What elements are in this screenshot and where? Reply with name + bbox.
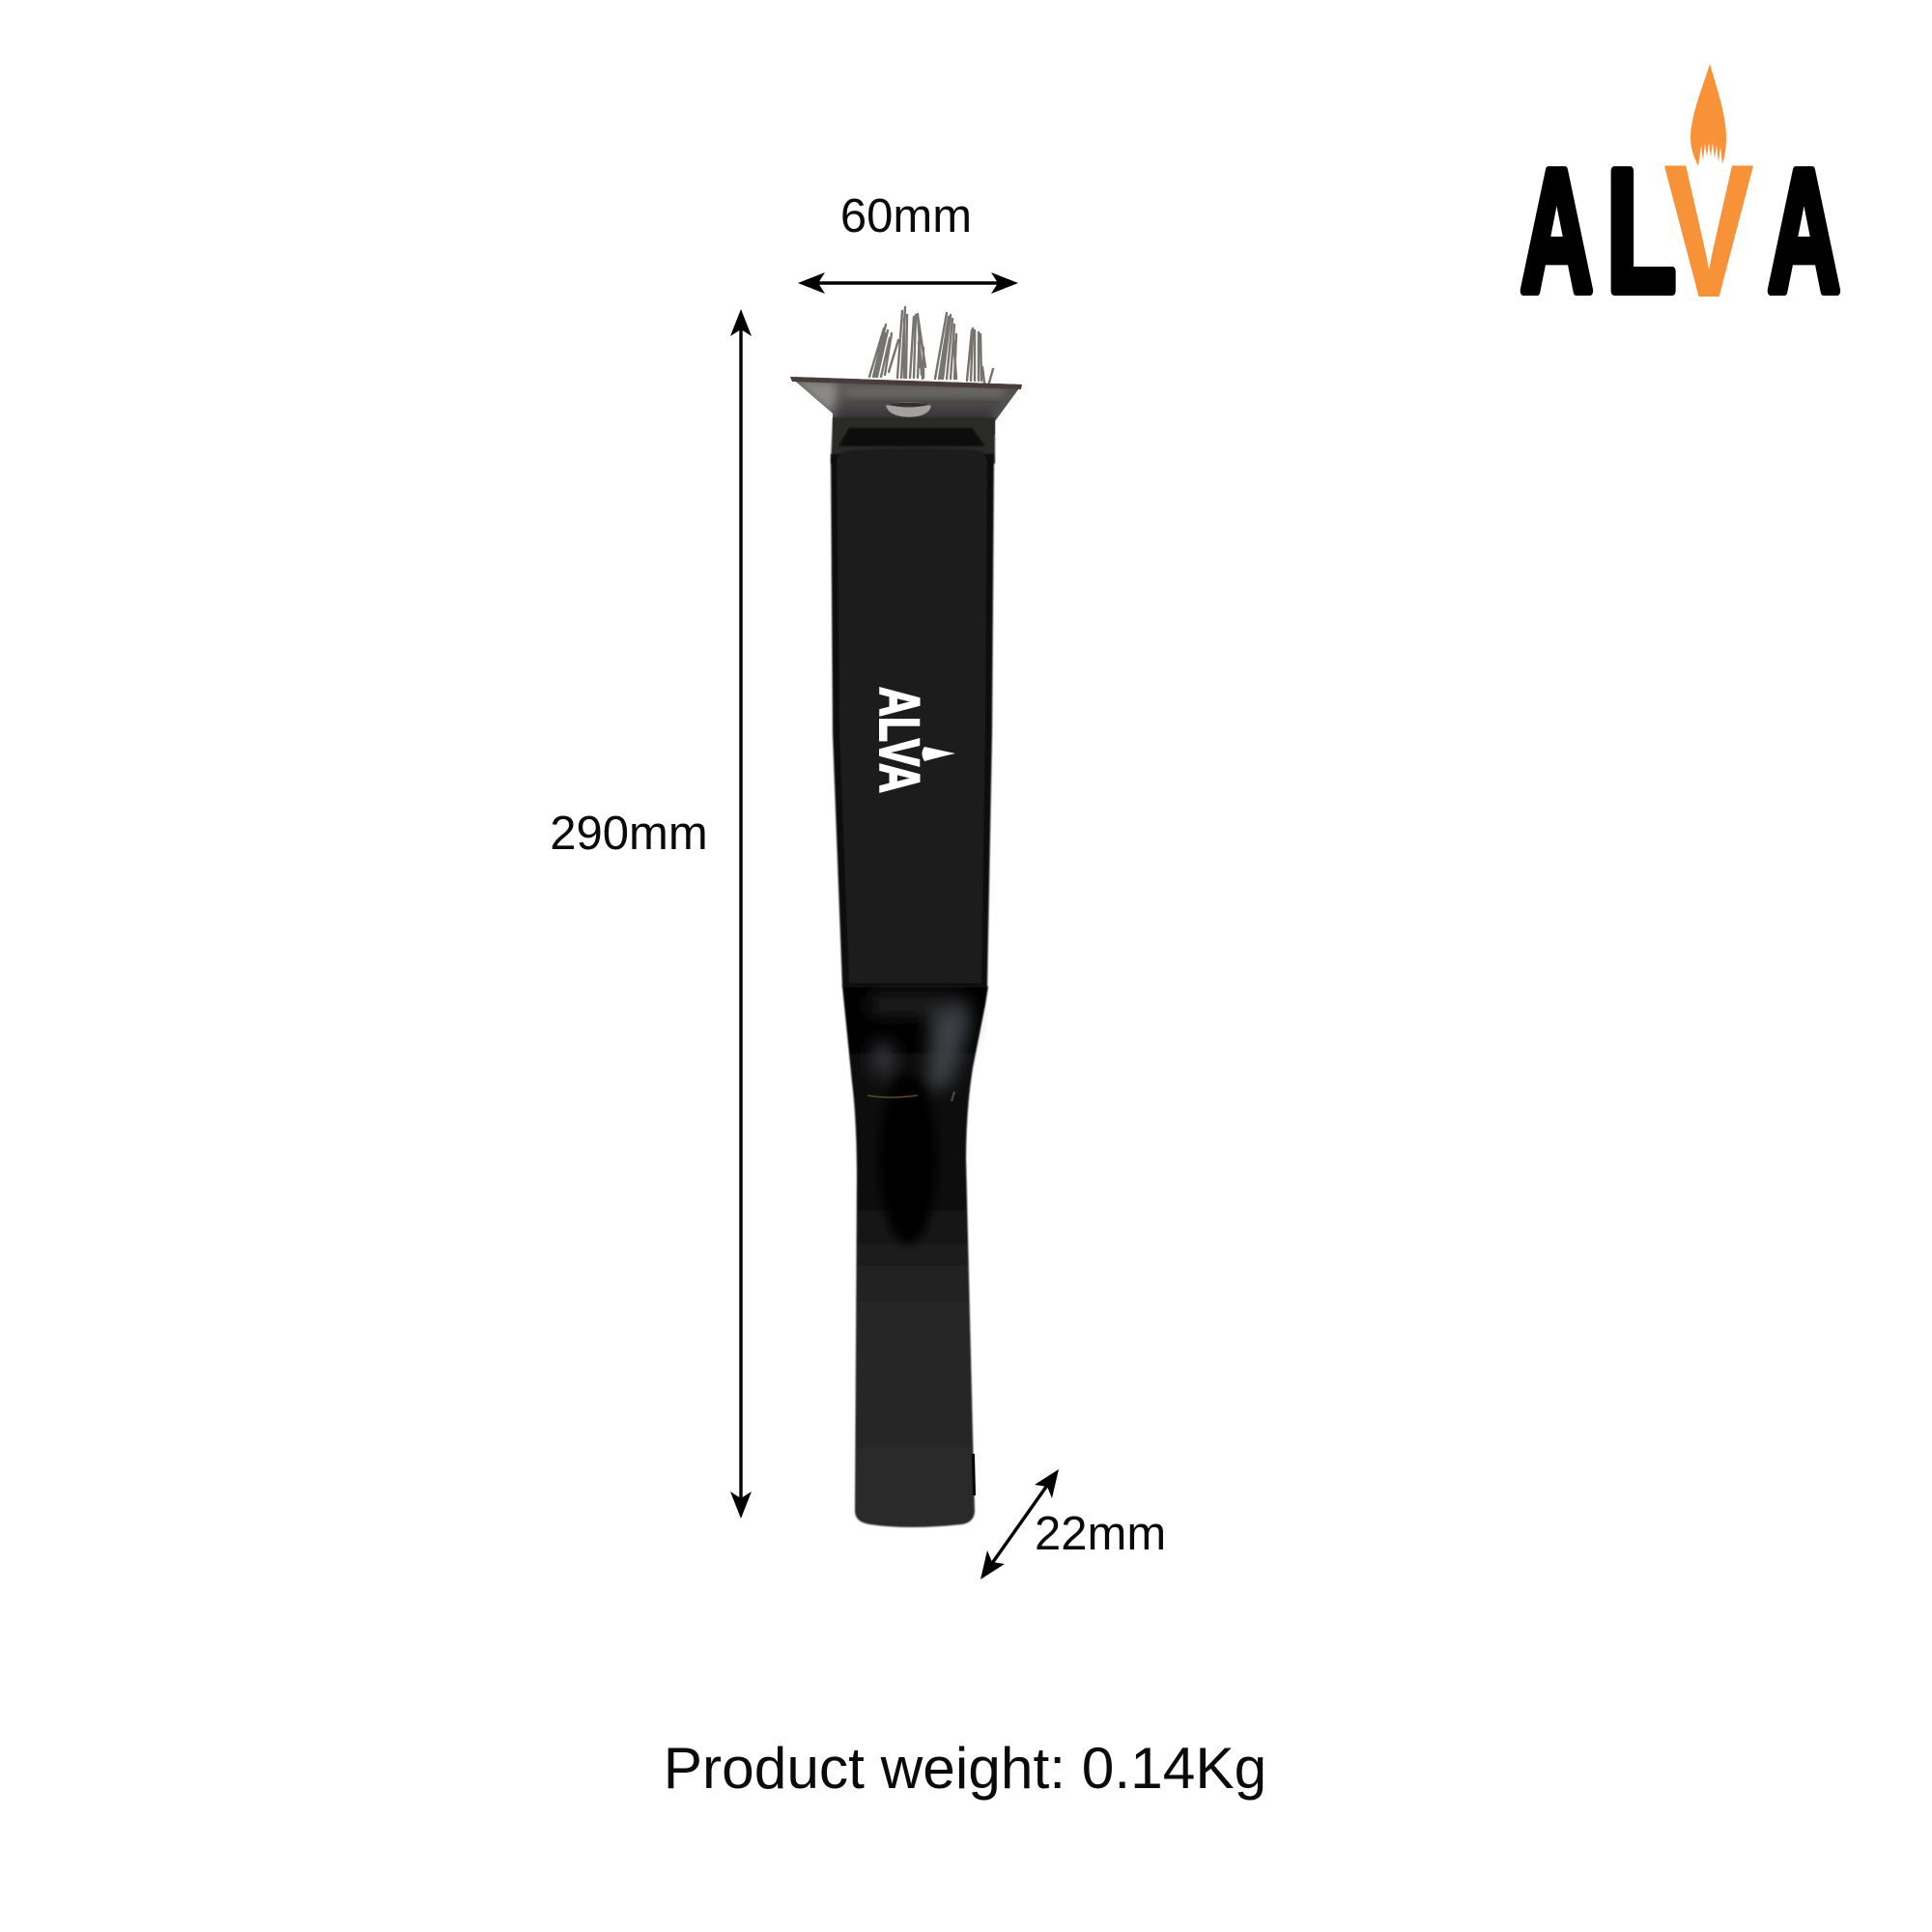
handle logo: ALVA bbox=[867, 687, 930, 793]
handle lower glossy part bbox=[842, 986, 988, 1527]
logo flame bbox=[1690, 64, 1726, 166]
logo: ALVA bbox=[1520, 64, 1840, 336]
steel plate bbox=[790, 377, 1022, 435]
logo letters: L bbox=[1606, 134, 1676, 328]
arrow: 290mm height bbox=[730, 309, 752, 1519]
label: 290mm: 290mm bbox=[550, 808, 708, 860]
handle reflections bbox=[869, 995, 971, 1092]
caption: product weight: Product weight: 0.14Kg bbox=[664, 1735, 1266, 1801]
handle neck bbox=[831, 417, 995, 464]
handle logo flame bbox=[922, 747, 955, 761]
label: 22mm: 22mm bbox=[1035, 1508, 1166, 1560]
label: 60mm: 60mm bbox=[840, 190, 972, 242]
handle upper grip bbox=[831, 454, 994, 987]
logo letters: A bbox=[1520, 134, 1593, 328]
arrow: 22mm depth bbox=[980, 1469, 1059, 1579]
logo letters: A bbox=[1768, 134, 1840, 328]
handle dark centre shadow bbox=[879, 1074, 937, 1244]
logo letters: V bbox=[1664, 127, 1753, 336]
bristles bbox=[869, 307, 993, 383]
arrow: 60mm width bbox=[798, 272, 1018, 294]
logo letters bbox=[1520, 127, 1840, 336]
product photo: wire brush bbox=[782, 307, 1034, 1527]
plate rivet bbox=[886, 402, 931, 417]
handle end slot bbox=[972, 1454, 976, 1495]
